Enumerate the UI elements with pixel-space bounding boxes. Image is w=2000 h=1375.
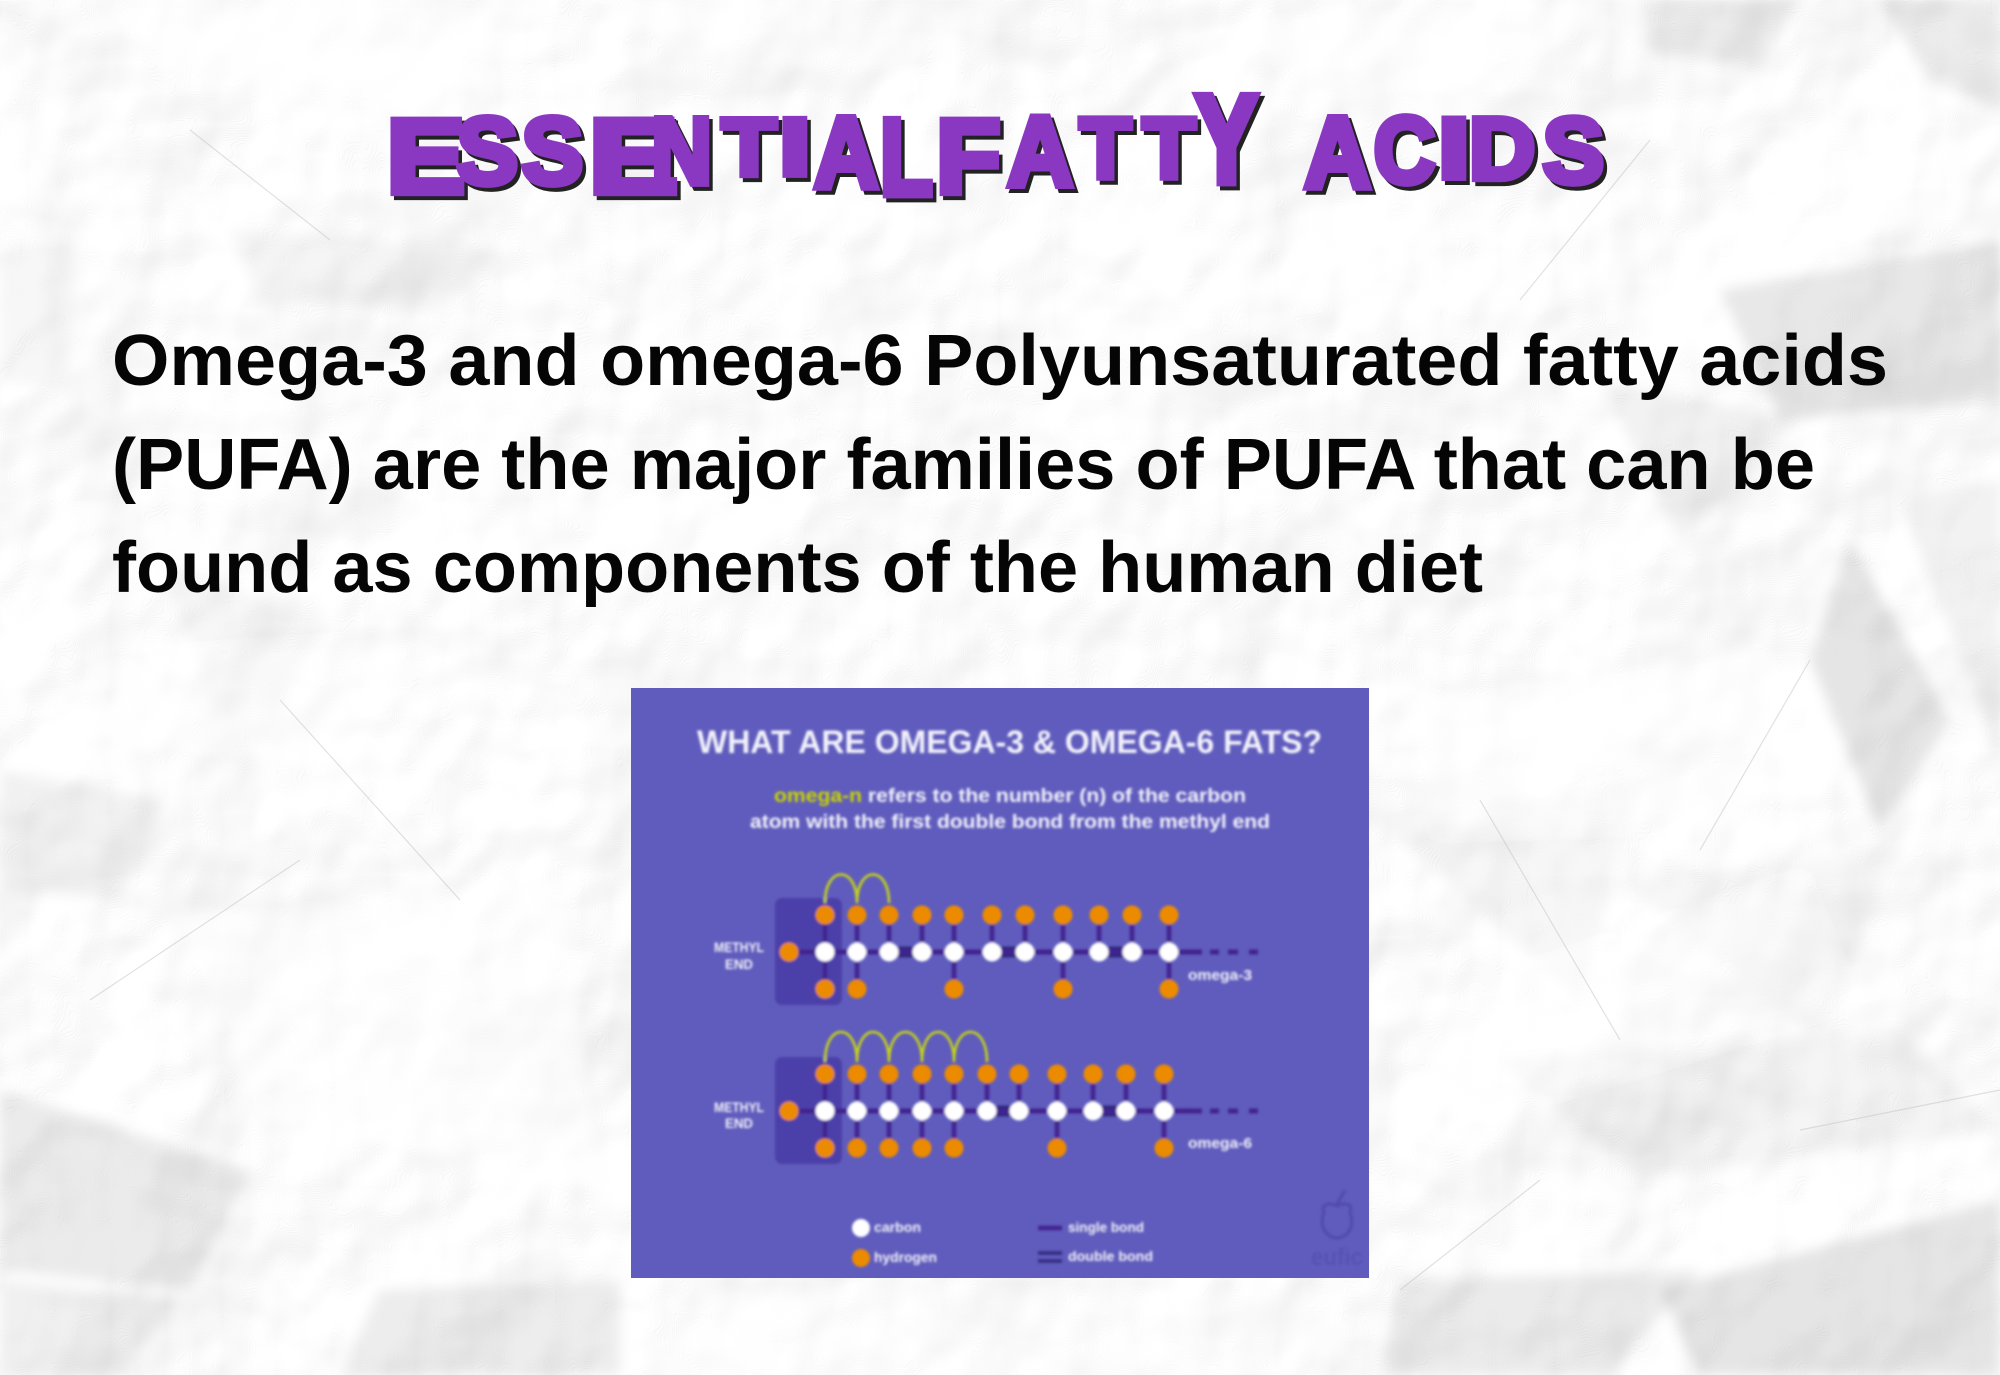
title: S [457,97,518,204]
title: T [722,102,776,193]
title: C [1374,97,1435,204]
title: D [1469,101,1535,198]
panel description: omega-n refers to the number (n) of the carbon [774,786,1246,807]
icon: eufic apple logo [1311,1190,1363,1271]
title: E [387,97,465,215]
title: F [936,98,1000,215]
panel: omega-3 and omega-6 explainer [631,688,1369,1278]
title: S [522,97,583,204]
icon: eufic apple logo: eufic [1311,1244,1363,1271]
omega-3 chain diagram [714,874,1258,1005]
title: L [880,95,933,218]
omega-6 chain diagram [714,1032,1258,1164]
title: Y [1195,71,1257,209]
intro text block: found as components of the human diet [112,528,1483,608]
intro text block: Omega-3 and omega-6 Polyunsaturated fatty acids [112,321,1888,401]
panel description: atom with the first double bond from the methyl end [750,812,1270,833]
omega-3 chain diagram: END [725,956,753,972]
panel description [750,786,1270,833]
title: S [1543,98,1604,203]
title: E [589,99,678,215]
omega-6 chain diagram: omega-6 [1188,1135,1252,1152]
omega-3 chain diagram: METHYL [714,939,764,955]
legend [852,1219,1153,1267]
panel heading: WHAT ARE OMEGA-3 & OMEGA-6 FATS? [697,724,1322,760]
omega-3 chain diagram: omega-3 [1188,967,1252,984]
title: A [1007,97,1073,207]
title [387,71,1604,218]
legend: hydrogen [874,1249,937,1265]
legend: double bond [1068,1248,1153,1264]
title: I [1438,99,1470,196]
title: T [1079,100,1131,197]
omega-6 chain diagram: END [725,1115,753,1131]
title: T [1142,100,1196,197]
title: A [1304,98,1371,209]
intro text block: (PUFA) are the major families of PUFA that can be [112,425,1815,505]
legend: carbon [874,1219,921,1235]
title: I [779,102,811,193]
intro text block [112,321,1888,608]
legend: single bond [1068,1219,1144,1235]
omega-6 chain diagram: METHYL [714,1099,764,1115]
title: N [651,99,712,205]
title: A [814,97,878,210]
